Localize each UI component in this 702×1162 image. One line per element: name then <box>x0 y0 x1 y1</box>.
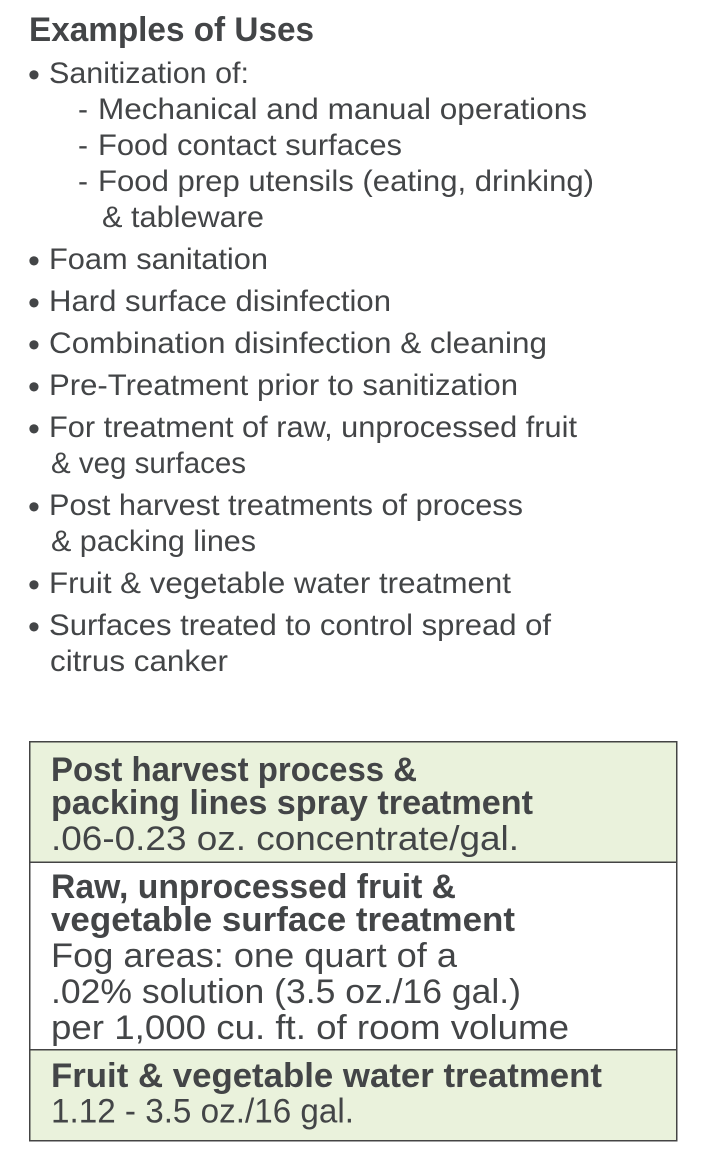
item: raw fruit treatment: For treatment of raw, unprocessed fruit <box>49 411 578 444</box>
row: raw fruit and vegetable surface treatment: .02% solution (3.5 oz./16 gal.) <box>51 973 521 1011</box>
item: combination: Combination disinfection & cleaning <box>49 327 547 360</box>
item: sanitization: Sanitization of: <box>49 57 249 90</box>
item: post harvest <box>28 488 523 558</box>
item: water treatment: • <box>28 566 40 604</box>
item: foam sanitation: Foam sanitation <box>49 243 268 276</box>
item: sanitization <box>28 56 594 234</box>
row: raw fruit and vegetable surface treatment: per 1,000 cu. ft. of room volume <box>51 1009 569 1047</box>
item: pre-treatment: • <box>28 368 40 406</box>
item: post harvest: Post harvest treatments of process <box>49 489 523 522</box>
item: citrus canker: Surfaces treated to control spread of <box>49 609 552 642</box>
item: hard surface disinfection: • <box>28 284 40 322</box>
item: raw fruit treatment: • <box>28 410 40 448</box>
item: water treatment: Fruit & vegetable water treatment <box>49 567 512 600</box>
item: raw fruit treatment <box>28 410 578 480</box>
item: sanitization: - <box>78 165 88 198</box>
item: sanitization: - <box>78 129 88 162</box>
item: hard surface disinfection: Hard surface disinfection <box>49 285 391 318</box>
item: sanitization: - <box>78 93 88 126</box>
list: examples of uses <box>28 56 594 678</box>
row: post harvest spray treatment <box>30 742 677 862</box>
item: foam sanitation: • <box>28 242 40 280</box>
item: raw fruit treatment: & veg surfaces <box>51 447 246 480</box>
item: combination: • <box>28 326 40 364</box>
item: sanitization: Food prep utensils (eating, drinking) <box>98 165 594 198</box>
row: raw fruit and vegetable surface treatment <box>30 862 677 1050</box>
row: post harvest spray treatment: .06-0.23 oz. concentrate/gal. <box>51 820 519 858</box>
row: raw fruit and vegetable surface treatment: Fog areas: one quart of a <box>51 937 457 975</box>
row: raw fruit and vegetable surface treatment: Raw, unprocessed fruit & <box>51 868 456 906</box>
item: post harvest: • <box>28 488 40 526</box>
item: sanitization: Food contact surfaces <box>98 129 402 162</box>
row: fruit and vegetable water treatment <box>30 1050 677 1141</box>
item: post harvest: & packing lines <box>51 525 256 558</box>
item: sanitization: & tableware <box>102 201 264 234</box>
item: sanitization: • <box>28 56 40 94</box>
item: citrus canker: • <box>28 608 40 646</box>
item: citrus canker: citrus canker <box>50 645 228 678</box>
row: post harvest spray treatment: Post harvest process & <box>51 751 417 789</box>
row: fruit and vegetable water treatment: 1.12 - 3.5 oz./16 gal. <box>51 1092 354 1130</box>
item: pre-treatment: Pre-Treatment prior to sanitization <box>49 369 518 402</box>
item: sanitization: Mechanical and manual operations <box>98 93 587 126</box>
row: raw fruit and vegetable surface treatment: vegetable surface treatment <box>51 901 515 939</box>
table: treatment rates <box>30 742 677 1141</box>
item: citrus canker <box>28 608 552 678</box>
heading: Examples of Uses: Examples of Uses <box>29 11 314 49</box>
row: fruit and vegetable water treatment: Fruit & vegetable water treatment <box>51 1057 602 1095</box>
row: post harvest spray treatment: packing lines spray treatment <box>51 784 533 822</box>
